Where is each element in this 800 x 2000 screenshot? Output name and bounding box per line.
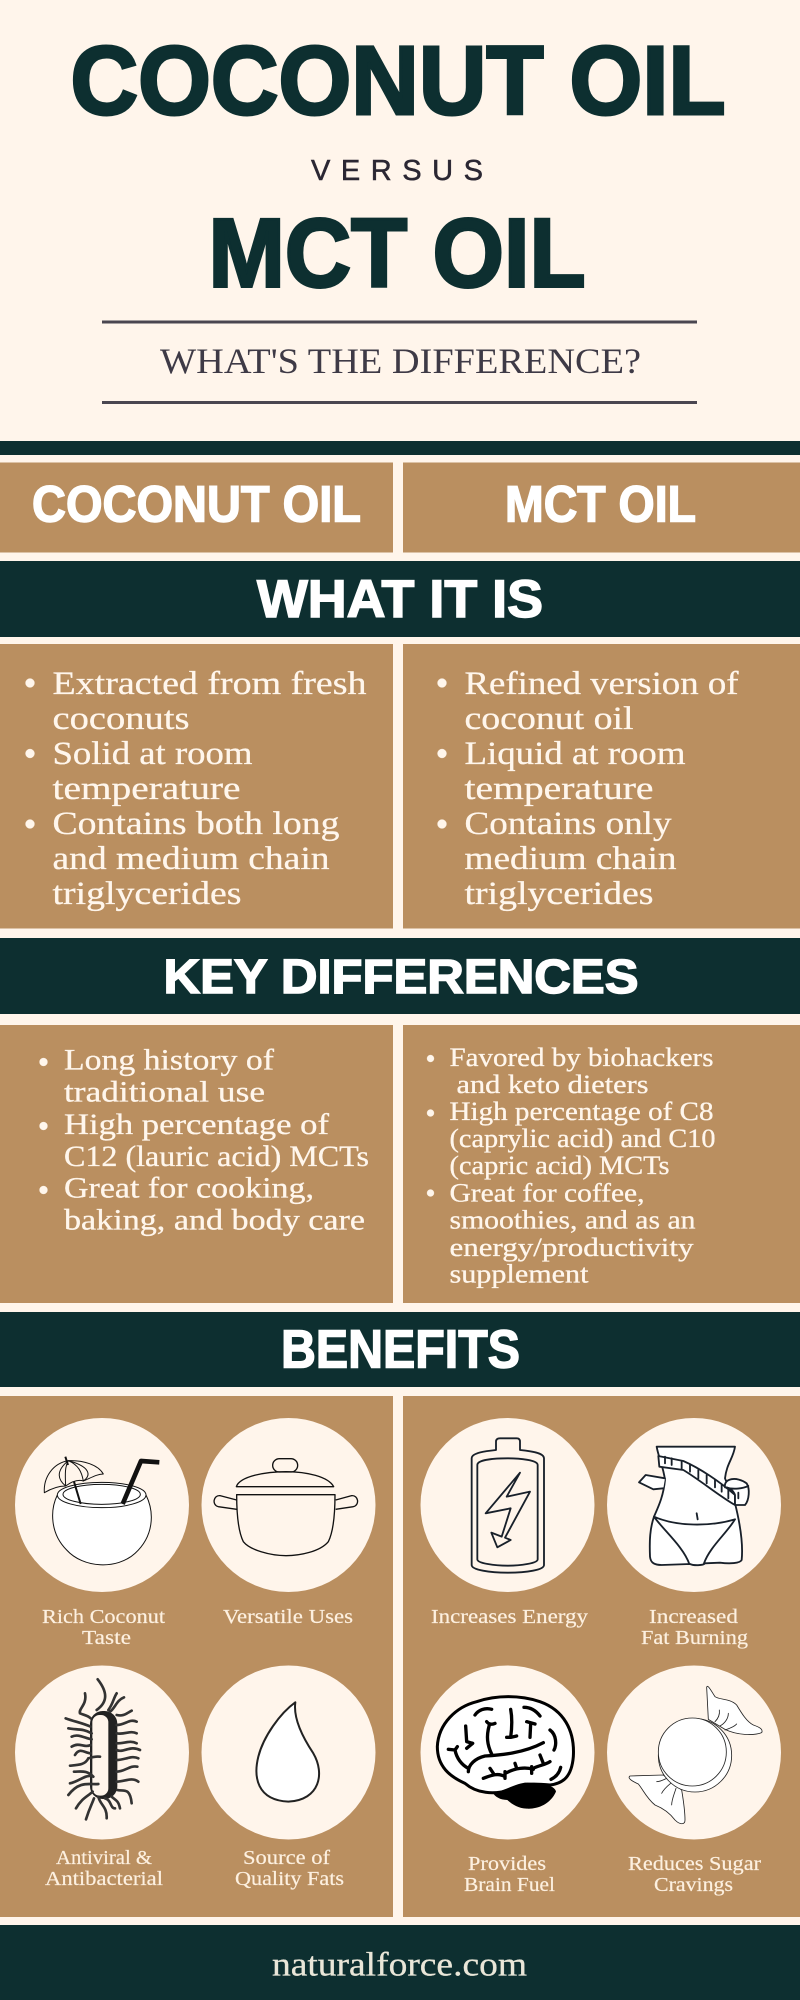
panel: coconut oil what it is: Extracted from fresh [52,666,367,702]
panel: mct oil key differences: and keto dieters [456,1070,648,1099]
benefit: increased fat burning [607,1418,781,1649]
panel: mct oil benefits [403,1396,800,1917]
subtitle block: what's the difference [102,320,697,404]
benefit: antiviral and antibacterial: Antibacterial [45,1868,163,1890]
benefit: reduces sugar cravings: Cravings [654,1874,733,1896]
benefit: provides brain fuel: Brain Fuel [464,1874,555,1896]
footer [0,1925,800,2000]
panel: mct oil key differences: energy/productivity [450,1233,694,1262]
panel: mct oil what it is: Refined version of [464,666,738,702]
column header: coconut oil [0,462,393,552]
icon: bacterium [66,1679,140,1819]
panel: coconut oil what it is [0,644,393,928]
benefit: rich coconut taste: Rich Coconut [42,1606,165,1628]
benefit: source of quality fats [202,1666,376,1890]
benefit: antiviral and antibacterial: Antiviral & [56,1847,152,1869]
benefit: increases energy: Increases Energy [431,1606,588,1628]
title: coconut oil: COCONUT OIL [70,26,726,135]
title: mct oil: MCT OIL [208,198,586,308]
panel: mct oil key differences: (caprylic acid) and C10 [450,1124,716,1153]
section heading: benefits [0,1312,800,1387]
panel: coconut oil key differences [0,1025,393,1303]
benefit: provides brain fuel [420,1666,594,1896]
subtitle: versus: VERSUS [311,155,483,187]
benefit: versatile uses: Versatile Uses [223,1606,353,1628]
top band [0,441,800,455]
benefit: increases energy [420,1418,594,1628]
subtitle block: what's the difference: WHAT'S THE DIFFERENCE? [160,341,641,381]
benefit: source of quality fats: Source of [243,1847,330,1869]
panel: mct oil what it is: Liquid at room [464,736,686,772]
panel: mct oil key differences: supplement [450,1260,589,1288]
panel: mct oil key differences: smoothies, and as an [450,1206,696,1234]
section heading: benefits: BENEFITS [281,1320,520,1380]
section heading: what it is [0,561,800,637]
icon: pot [214,1459,358,1556]
icon: candy [629,1686,762,1824]
benefit: antiviral and antibacterial [15,1666,189,1890]
panel: coconut oil what it is: temperature [52,771,240,807]
icon: coconut drink [44,1457,159,1565]
panel: coconut oil key differences: Great for cooking, [64,1172,314,1204]
benefit: reduces sugar cravings: Reduces Sugar [628,1853,761,1875]
panel: mct oil what it is: temperature [464,771,654,807]
section heading: key differences [0,938,800,1014]
panel: mct oil key differences: (capric acid) MCTs [450,1151,670,1180]
section heading: what it is: WHAT IT IS [257,570,543,629]
benefit: provides brain fuel: Provides [468,1853,546,1875]
icon: oil drop [256,1702,319,1802]
panel: mct oil key differences: Favored by biohackers [450,1043,714,1072]
panel: coconut oil key differences: High percentage of [64,1108,329,1141]
benefit: rich coconut taste [15,1418,189,1649]
column header: coconut oil: COCONUT OIL [32,476,361,532]
panel: mct oil what it is: Contains only [464,806,672,842]
column header: mct oil [403,462,800,552]
benefit: versatile uses [202,1418,376,1628]
benefit: source of quality fats: Quality Fats [235,1868,344,1890]
panel: mct oil what it is: medium chain [464,841,676,877]
section heading: key differences: KEY DIFFERENCES [164,951,638,1004]
panel: coconut oil benefits [0,1396,393,1917]
panel: mct oil what it is: triglycerides [464,876,654,912]
panel: coconut oil what it is: Solid at room [52,736,253,772]
panel: mct oil key differences: Great for coffee, [450,1178,644,1208]
benefit: reduces sugar cravings [607,1666,781,1896]
benefit: increased fat burning: Fat Burning [641,1627,748,1649]
panel: coconut oil what it is: coconuts [52,701,190,737]
icon: brain [437,1697,573,1809]
icon: waist with measuring tape [639,1447,749,1565]
panel: coconut oil key differences: baking, and body care [64,1204,365,1236]
panel: mct oil key differences: High percentage of C8 [450,1097,714,1126]
panel: mct oil what it is [403,644,800,928]
benefit: increased fat burning: Increased [649,1606,738,1628]
footer: naturalforce.com [272,1946,527,1984]
panel: coconut oil key differences: Long history of [64,1044,274,1076]
column header: mct oil: MCT OIL [505,476,696,532]
panel: mct oil what it is: coconut oil [464,701,634,737]
benefit: rich coconut taste: Taste [82,1627,131,1649]
panel: coconut oil what it is: and medium chain [52,841,330,877]
panel: coconut oil what it is: triglycerides [52,876,242,912]
panel: coconut oil what it is: Contains both long [52,806,340,842]
panel: coconut oil key differences: C12 (lauric acid) MCTs [64,1140,369,1173]
panel: coconut oil key differences: traditional use [64,1076,265,1108]
icon: battery [472,1438,544,1573]
panel: mct oil key differences [403,1025,800,1303]
